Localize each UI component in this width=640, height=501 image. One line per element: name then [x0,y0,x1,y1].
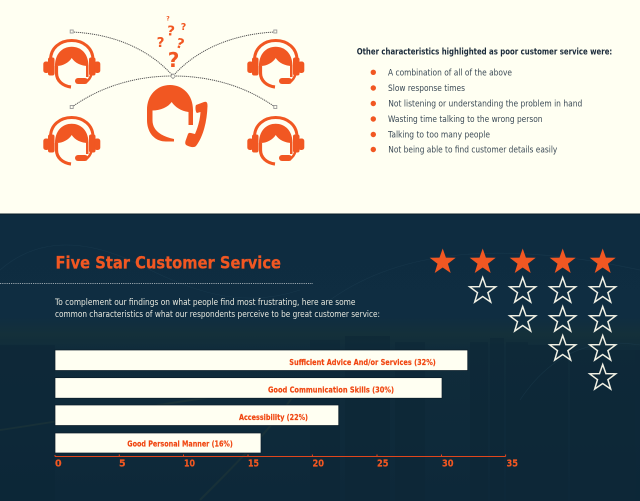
panel: top cream background [0,0,640,214]
intro paragraph: common characteristics of what our respondents perceive to be great customer service: [55,310,380,320]
icon: headset agent top left [43,40,100,87]
axis labels: 35 [506,458,518,470]
title: Five Star Customer Service [56,254,281,272]
connector nodes [70,30,277,108]
icon: headset agent bottom right [247,118,304,164]
bar: personal manner: Good Personal Manner (16%) [127,438,233,448]
bar: accessibility: Accessibility (22%) [239,412,308,422]
outline stars [470,278,616,389]
connector lines [72,32,275,107]
diagram: agents connected to central agent [43,16,304,164]
axis labels: 0 [55,458,62,470]
icon: headset agent top right [247,40,304,87]
axis labels: 30 [442,458,454,470]
axis labels: 20 [312,458,324,470]
icon: question marks: ? [166,16,170,22]
light arcs [0,245,640,400]
list items: Slow response times [388,84,465,94]
star rating columns [430,248,616,389]
icon: question marks [157,16,186,72]
axis labels: 10 [184,458,195,470]
icon: headset agent bottom left [43,118,100,164]
icon: question marks: ? [166,23,175,40]
bar: sufficient advice [55,350,468,370]
bar: sufficient advice: Sufficient Advice And/or Services (32%) [289,357,436,367]
title divider [0,282,313,284]
text block: poor service list [357,48,612,156]
road lights [0,385,300,500]
list items: Not listening or understanding the problem in hand [388,100,582,110]
icon: central agent with phone [147,85,208,147]
list items: Wasting time talking to the wrong person [388,115,542,125]
icon: question marks: ? [174,35,186,53]
bar: communication [55,378,442,398]
intro paragraph [54,298,380,320]
x axis [55,454,506,456]
filled stars [430,248,616,273]
panel: dark navy section [0,214,640,501]
list items [387,68,582,156]
bar chart [55,350,518,470]
axis labels: 25 [377,458,388,470]
axis labels: 5 [119,458,126,470]
list items: A combination of all of the above [388,68,512,78]
axis labels [55,458,518,470]
list bullets [371,70,376,152]
icon: question marks: ? [181,22,186,33]
intro paragraph: To complement our findings on what people find most frustrating, here are some [54,298,356,308]
axis labels: 15 [248,458,259,470]
icon: question marks: ? [168,48,179,72]
list items: Talking to too many people [387,130,490,140]
list items: Not being able to find customer details easily [388,146,557,156]
bar: accessibility [55,405,339,426]
skyline backdrop [0,336,640,501]
icon: question marks: ? [157,35,164,51]
bar: personal manner [55,433,261,453]
bar: communication: Good Communication Skills (30%) [268,384,394,394]
